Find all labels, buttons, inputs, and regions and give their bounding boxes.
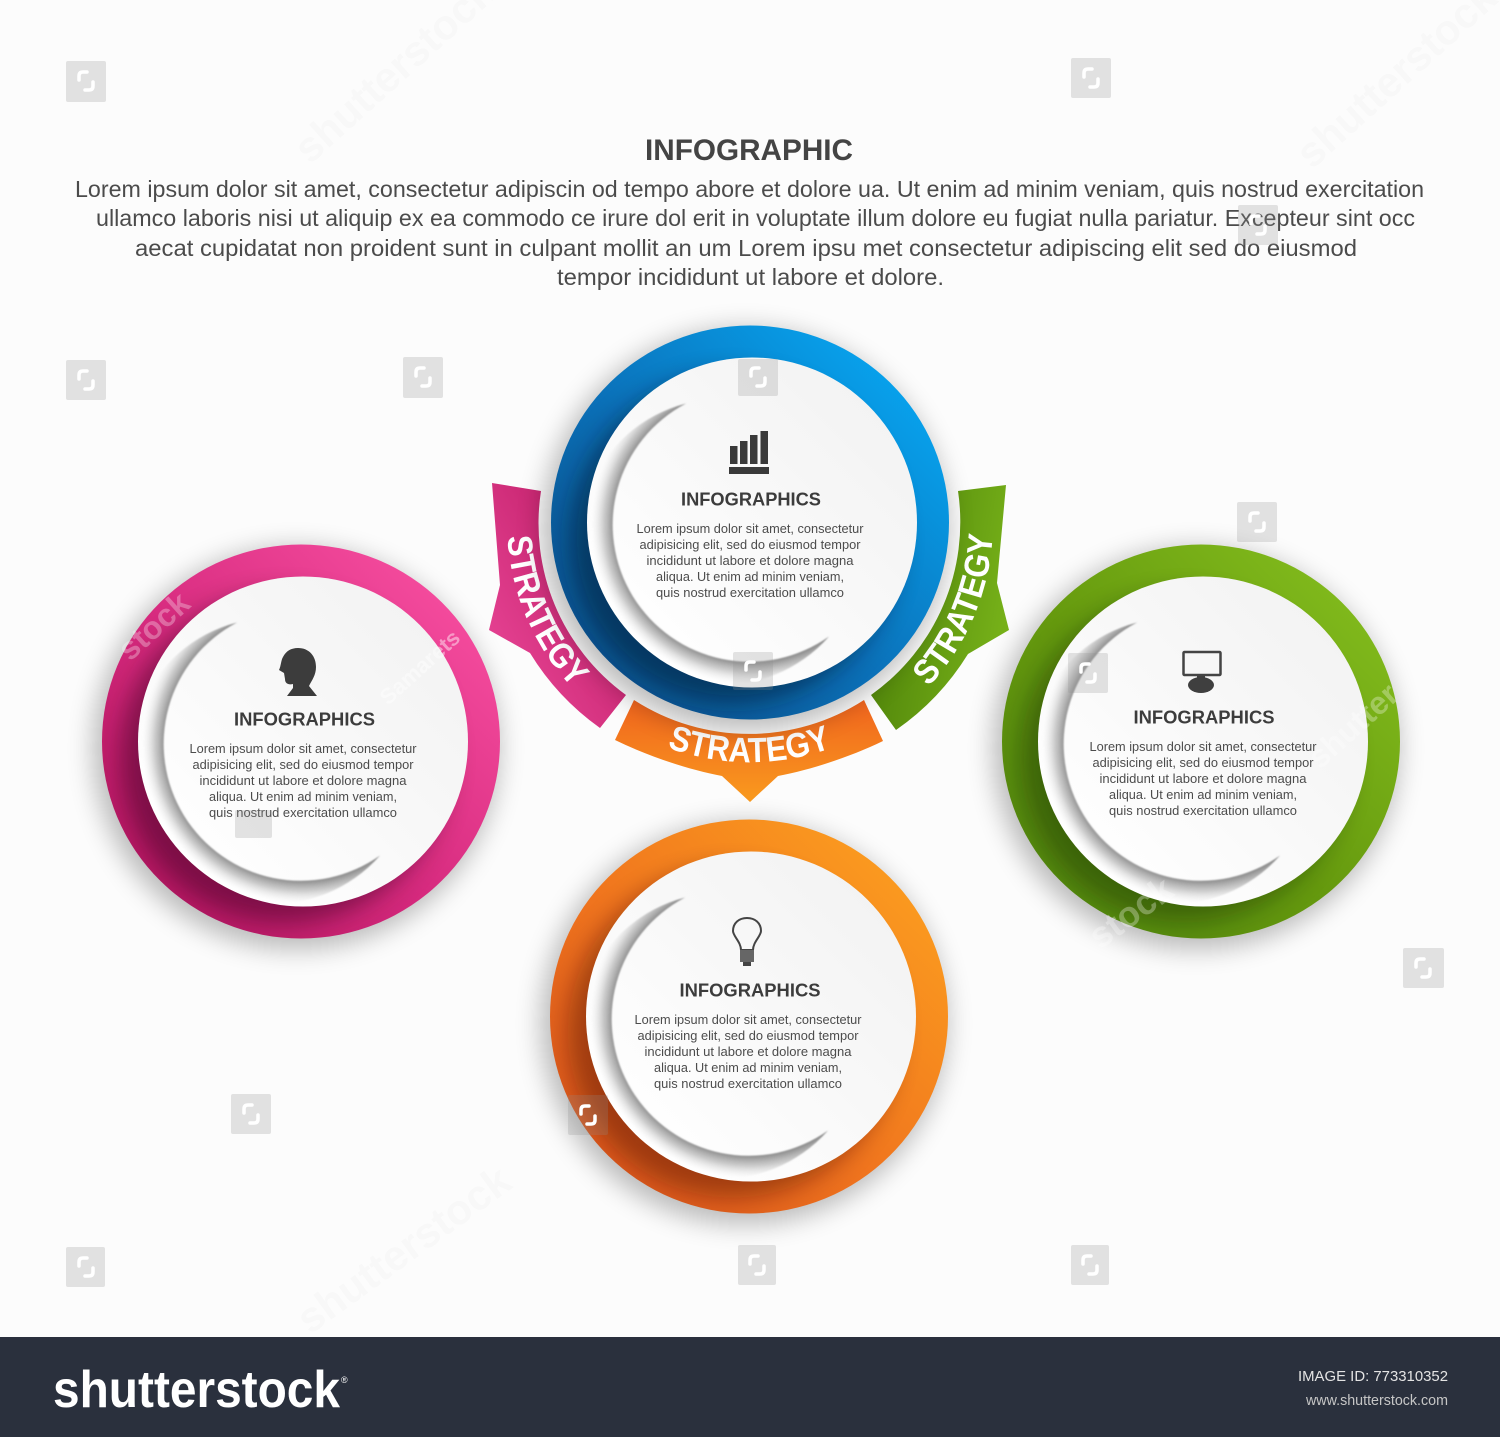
panel: green circle bbox=[993, 544, 1400, 950]
text: pink circle bbox=[190, 710, 416, 820]
icon: light bulb bbox=[733, 918, 761, 966]
text: pink circle: incididunt ut labore et dolore magna bbox=[200, 774, 407, 788]
text: orange circle: incididunt ut labore et dolore magna bbox=[644, 1045, 852, 1059]
text: orange circle: INFOGRAPHICS bbox=[680, 980, 820, 1000]
text: blue circle: Lorem ipsum dolor sit amet, consectetur bbox=[636, 522, 864, 536]
text: orange circle: adipisicing elit, sed do eiusmod tempor bbox=[638, 1029, 858, 1043]
background text watermarks bbox=[285, 0, 1500, 1342]
intro paragraph: Lorem ipsum dolor sit amet, consectetur adipiscin od tempo abore et dolore ua. Ut enim ad minim veniam, quis nostrud exercitation bbox=[75, 176, 1424, 202]
panel: pink circle bbox=[93, 544, 500, 950]
ring text watermarks: shutter bbox=[1301, 676, 1405, 775]
ring text watermarks: stock bbox=[111, 584, 197, 667]
title: INFOGRAPHIC bbox=[645, 134, 853, 167]
footer logo: shutterstock bbox=[53, 1361, 340, 1419]
footer bar bbox=[0, 1337, 1500, 1437]
intro paragraph bbox=[75, 176, 1424, 290]
text: orange circle bbox=[634, 980, 862, 1091]
text: green circle: quis nostrud exercitation ullamco bbox=[1109, 804, 1297, 818]
ribbon: green strategy bbox=[871, 485, 1009, 730]
footer bar: ® bbox=[341, 1375, 348, 1385]
ribbon: orange strategy: STRATEGY bbox=[670, 725, 824, 762]
text: blue circle: INFOGRAPHICS bbox=[681, 490, 821, 510]
ribbon: pink strategy: STRATEGY bbox=[508, 536, 590, 682]
ring text watermarks bbox=[111, 584, 1405, 956]
text: green circle: incididunt ut labore et dolore magna bbox=[1100, 772, 1307, 786]
text: green circle: aliqua. Ut enim ad minim veniam, bbox=[1109, 788, 1297, 802]
text: orange circle: Lorem ipsum dolor sit amet, consectetur bbox=[634, 1013, 862, 1027]
text: pink circle: INFOGRAPHICS bbox=[234, 710, 375, 730]
panel: orange circle bbox=[541, 820, 948, 1224]
ribbon: pink strategy bbox=[489, 483, 626, 728]
icon: monitor bbox=[1184, 652, 1220, 693]
text: green circle bbox=[1090, 708, 1316, 818]
icon: head silhouette bbox=[279, 648, 317, 696]
ring text watermarks: Samarets bbox=[375, 625, 465, 710]
text: pink circle: Lorem ipsum dolor sit amet, consectetur bbox=[190, 742, 416, 756]
ring text watermarks: stock bbox=[1081, 867, 1182, 956]
text: pink circle: aliqua. Ut enim ad minim veniam, bbox=[209, 790, 397, 804]
ribbon: orange strategy bbox=[615, 700, 883, 802]
text: orange circle: quis nostrud exercitation ullamco bbox=[654, 1077, 842, 1091]
text: blue circle: quis nostrud exercitation ullamco bbox=[656, 586, 844, 600]
panel: blue circle bbox=[542, 326, 949, 730]
ribbon: green strategy: STRATEGY bbox=[914, 533, 992, 684]
text: orange circle: aliqua. Ut enim ad minim veniam, bbox=[654, 1061, 842, 1075]
footer bar: IMAGE ID: 773310352 bbox=[1298, 1368, 1448, 1385]
text: pink circle: adipisicing elit, sed do eiusmod tempor bbox=[192, 758, 414, 772]
footer bar: www.shutterstock.com bbox=[1305, 1393, 1448, 1409]
text: green circle: INFOGRAPHICS bbox=[1134, 708, 1274, 728]
text: green circle: Lorem ipsum dolor sit amet, consectetur bbox=[1090, 740, 1316, 754]
text: blue circle bbox=[636, 490, 864, 600]
icon: bar chart bbox=[729, 431, 769, 474]
intro paragraph: ullamco laboris nisi ut aliquip ex ea commodo ce irure dol erit in voluptate illum dolore eu fugiat nulla pariatur. Excepteur sint occ bbox=[96, 205, 1415, 231]
square watermarks bbox=[66, 58, 1444, 1287]
text: blue circle: incididunt ut labore et dolore magna bbox=[646, 554, 854, 568]
text: green circle: adipisicing elit, sed do eiusmod tempor bbox=[1092, 756, 1314, 770]
text: pink circle: quis nostrud exercitation ullamco bbox=[209, 806, 397, 820]
text: blue circle: aliqua. Ut enim ad minim veniam, bbox=[656, 570, 844, 584]
text: blue circle: adipisicing elit, sed do eiusmod tempor bbox=[640, 538, 860, 552]
background text watermarks: shutterstock bbox=[288, 1156, 520, 1342]
intro paragraph: tempor incididunt ut labore et dolore. bbox=[557, 264, 944, 290]
intro paragraph: aecat cupidatat non proident sunt in culpant mollit an um Lorem ipsu met consectetur adipiscing elit sed do eiusmod bbox=[135, 235, 1357, 261]
